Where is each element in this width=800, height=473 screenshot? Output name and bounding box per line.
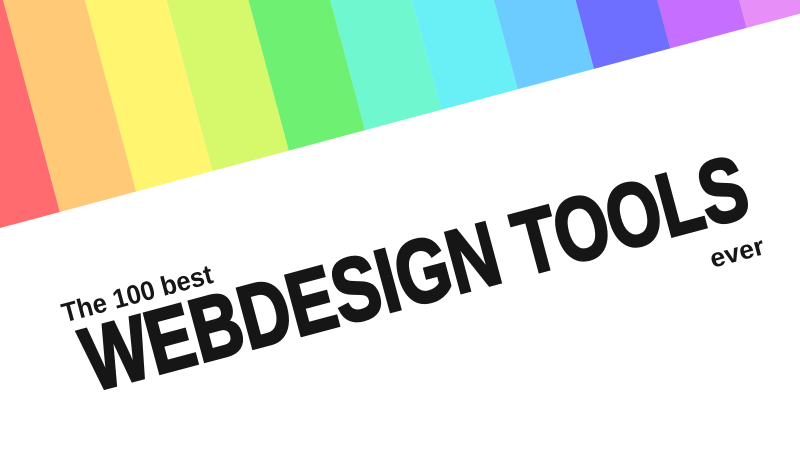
rainbow stripes — [0, 0, 800, 280]
subtitle: The 100 best: The 100 best — [58, 259, 216, 328]
title group — [58, 119, 767, 439]
ever: ever — [706, 231, 767, 274]
